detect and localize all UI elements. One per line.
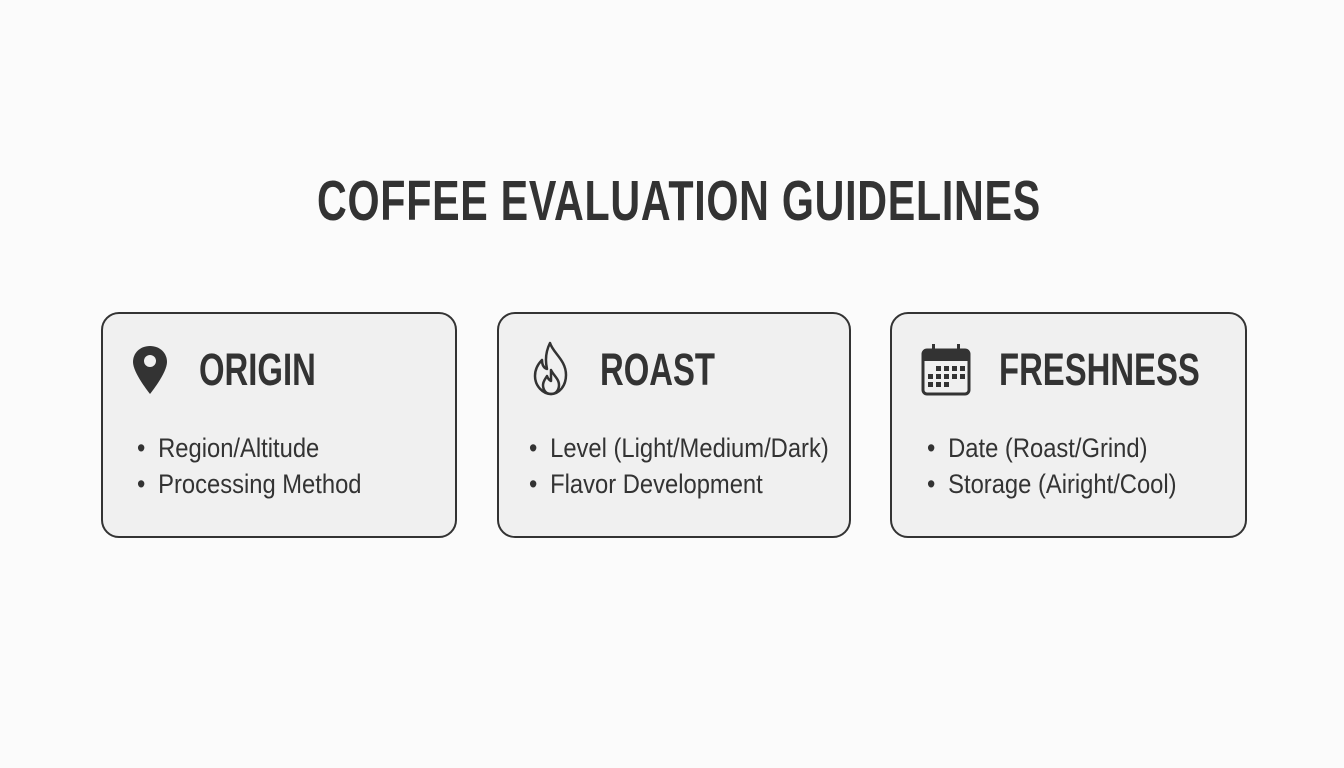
list: freshness: • — [927, 469, 935, 499]
list: origin: • — [137, 469, 145, 499]
list: origin: • — [137, 433, 145, 463]
list: roast: • — [529, 433, 537, 463]
heading: freshness: FRESHNESS — [999, 344, 1200, 395]
title: COFFEE EVALUATION GUIDELINES — [317, 169, 1041, 233]
panel: roast — [497, 312, 851, 538]
heading: origin: ORIGIN — [199, 344, 316, 395]
list: freshness: • — [927, 433, 935, 463]
list: origin: Processing Method — [158, 469, 362, 499]
list: origin: Region/Altitude — [158, 433, 319, 463]
list: roast: Flavor Development — [550, 469, 763, 499]
icon: calendar — [922, 344, 970, 396]
list: roast: • — [529, 469, 537, 499]
list: freshness: Storage (Airight/Cool) — [948, 469, 1177, 499]
list: origin — [137, 433, 362, 499]
list: roast — [529, 433, 829, 499]
heading: roast: ROAST — [600, 344, 715, 395]
list: roast: Level (Light/Medium/Dark) — [550, 433, 829, 463]
list: freshness: Date (Roast/Grind) — [948, 433, 1148, 463]
icon: location pin — [133, 346, 167, 394]
icon: flame — [534, 342, 568, 396]
panel: freshness — [890, 312, 1247, 538]
list: freshness — [927, 433, 1177, 499]
panel: origin — [101, 312, 457, 538]
